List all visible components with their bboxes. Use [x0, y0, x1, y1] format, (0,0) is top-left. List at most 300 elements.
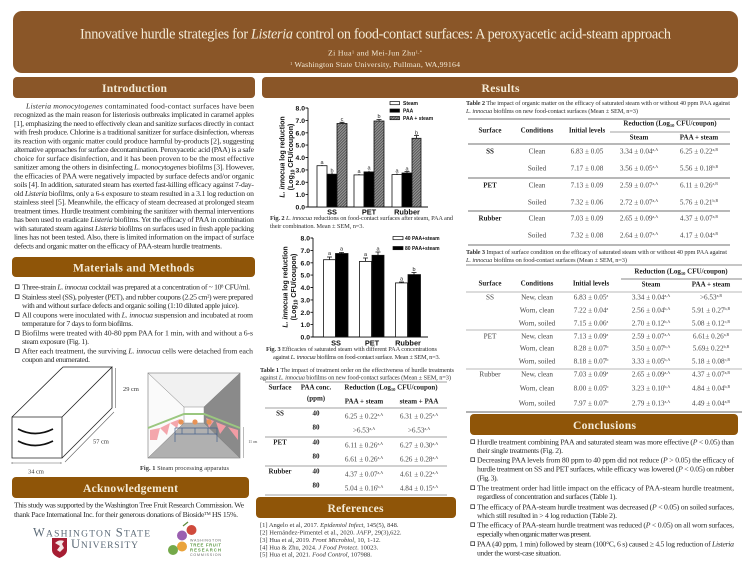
table 3: b,A — [664, 384, 670, 390]
diagram: steam chamber box: 29 cm — [123, 386, 139, 393]
list: conclusions: The treatment order had little impact on the efficacy of PAA-steam hurdle treatment, — [477, 484, 734, 492]
diagram: steam chamber box: 57 cm — [93, 438, 109, 446]
table 2: Surface — [479, 126, 501, 134]
text: introduction body: with saturated steam against Listeria biofilms on surfaces used in fresh apple packing — [14, 224, 254, 233]
text: acknowledgement: HS 15%. — [210, 510, 238, 519]
logo: Washington Tree Fruit Research Commission — [168, 522, 221, 557]
table 2: Soiled — [528, 232, 547, 240]
table 2: 6.83 ± 0.05 — [571, 148, 604, 156]
table 1: a,A — [433, 470, 438, 476]
table 1: a,A — [433, 455, 438, 461]
table 3: b,A — [664, 344, 670, 350]
list: conclusions: especially when organic matter was present. — [477, 530, 591, 538]
legend: figure 2: PAA + steam — [403, 116, 434, 122]
table 3: SS — [486, 294, 494, 302]
heading: results: Results — [482, 82, 520, 95]
bar chart: figure 2: 1.0 — [296, 192, 305, 199]
table 3: Conditions — [521, 280, 554, 288]
table 1: 4.84 ± 0.15 — [400, 484, 433, 492]
bar chart: figure 3: SS — [331, 338, 341, 348]
table 3: a,B — [725, 399, 730, 405]
table 3: 5.91 ± 0.27 — [692, 306, 725, 314]
table 3: c,B — [725, 319, 730, 325]
table 1: 6.11 ± 0.26 — [345, 442, 377, 450]
table 2: a,A — [653, 214, 658, 220]
table 3: 4.37 ± 0.07 — [692, 370, 725, 378]
heading: introduction: Introduction — [102, 82, 168, 95]
text: acknowledgement: This study was supported by the Washington Tree Fruit Research Commission. We — [14, 500, 245, 510]
table 2: 3.34 ± 0.04 — [620, 148, 653, 156]
table 2: Conditions — [521, 126, 554, 134]
table 3: New, clean — [521, 332, 553, 340]
table 2: 6.25 ± 0.22 — [680, 148, 713, 156]
bar chart: figure 2: Rubber — [394, 208, 420, 216]
table 3: 2.59 ± 0.07 — [632, 332, 665, 340]
table 3: 10 — [681, 271, 686, 276]
list: methods: After each treatment, the surviving L. innocua cells were detached from each — [22, 346, 253, 356]
bar chart: figure 3: a — [400, 276, 404, 282]
bar chart: figure 3: 5.0 — [301, 273, 310, 280]
table 3: 7.22 ± 0.04 — [574, 306, 606, 314]
table 1: 10 — [391, 387, 396, 392]
table 1: (ppm) — [307, 394, 326, 402]
bar chart: figure 2: 8.0 — [296, 106, 305, 112]
table 3 — [465, 249, 742, 412]
table 3: 2.65 ± 0.09 — [632, 370, 665, 378]
list: methods: coupon and enumerated. — [22, 355, 90, 364]
table 3: b — [606, 384, 608, 389]
table 2: a,B — [712, 181, 718, 187]
table 3: 3.34 ± 0.04 — [632, 294, 665, 302]
text: introduction body: [1], emphasizing the need to effectively clean and sanitize surfaces directly in contact — [14, 119, 255, 128]
text: introduction body: its reaction with organic matter could produce harmful by-products [2], suggesting — [14, 136, 254, 146]
table 3: a,B — [717, 293, 722, 299]
table 1: >6.53 — [408, 426, 424, 434]
list: references: [4] Hua & Zhu, 2024. J Food Protect. 10023. — [260, 544, 379, 551]
bar chart: figure 2: 0.0 — [296, 204, 305, 212]
list: methods: Three-strain L. innocua cocktail was prepared at a concentration of ~ 10 — [22, 282, 221, 292]
table 1: a,A — [433, 441, 438, 447]
table 2: Clean — [529, 214, 546, 222]
caption: table 3 — [465, 249, 727, 264]
logo: Washington Tree Fruit Research Commission: COMMISSION — [190, 553, 221, 557]
table 2: a,B — [713, 214, 718, 220]
table 3: Worn, soiled — [519, 400, 556, 408]
diagram: steam chamber box — [12, 367, 139, 476]
table 1 — [260, 367, 454, 495]
bar chart: figure 2: SS — [327, 208, 337, 216]
bar chart: figure 2: (Log — [288, 175, 295, 190]
bar chart: figure 2: a — [367, 166, 371, 172]
table 2: 2.72 ± 0.07 — [620, 198, 653, 206]
text: introduction body: old Listeria biofilms, only a 6-s exposure to steam resulted in a 3.1 log reduction on — [14, 189, 254, 198]
bar chart: figure 3: 8.0 — [301, 236, 310, 242]
text: introduction body: the efficacies of PAA were negatively impacted by surface defects and/or organic — [14, 172, 255, 180]
table 3: b,B — [724, 344, 730, 350]
text: acknowledgement: TM — [204, 511, 211, 516]
table 3: b,A — [664, 306, 670, 312]
table 3: 4.84 ± 0.04 — [692, 384, 725, 392]
table 2: Initial levels — [569, 126, 605, 134]
bar chart: figure 3: (Log — [291, 305, 298, 320]
bar chart: figure 3: 10 — [294, 299, 300, 305]
list: conclusions: Hurdle treatment combining PAA and saturated steam was more effective (P < 0.05) than — [477, 438, 734, 446]
heading: references — [256, 497, 456, 518]
table 1: SS — [276, 410, 284, 418]
diagram: steam chamber box: 34 cm — [28, 468, 44, 476]
table 3: CFU/coupon) — [685, 268, 728, 276]
table 3: 8.28 ± 0.07 — [574, 344, 606, 352]
table 1: CFU/coupon) — [395, 384, 438, 392]
table 3: 6.83 ± 0.05 — [574, 294, 606, 302]
table 3: 8.18 ± 0.07 — [574, 358, 606, 366]
table 2: SS — [486, 148, 494, 156]
table 1: a,A — [433, 484, 438, 490]
table 3: New, clean — [521, 370, 553, 378]
diagram: steam processing apparatus: 11 cm — [248, 440, 257, 444]
text: introduction body: alternative approaches for surface decontamination. Peroxyacetic acid (PAA) is a safe — [14, 145, 255, 154]
text: introduction body: sanitizer among the others in disinfecting L. monocytogenes biofilms [3]. However, — [14, 163, 254, 172]
bar chart: figure 2: 2.0 — [296, 180, 305, 187]
text: introduction body: lines has not been tested. Also, there is limited information on the impact of surface — [14, 233, 255, 242]
table 3: Worn, clean — [520, 344, 555, 352]
legend: figure 3 — [393, 236, 440, 252]
heading: acknowledgement: Acknowledgement — [83, 482, 178, 495]
table 3: 2.79 ± 0.13 — [632, 400, 665, 408]
bar chart: figure 3: 0.0 — [301, 334, 310, 342]
table 3: 4.49 ± 0.04 — [692, 400, 725, 408]
text: introduction body: choice for surface disinfection, and it has been proven to be the most effective — [14, 154, 255, 163]
text: acknowledgement — [14, 500, 245, 519]
table 3: Initial levels — [573, 280, 609, 288]
table 3: b,B — [725, 384, 731, 390]
list: methods: temperature for 7 days to form biofilms. — [22, 319, 133, 328]
table 2: a,A — [653, 164, 658, 170]
table 1: 80 — [312, 424, 320, 432]
bar chart: figure 2: 10 — [290, 169, 296, 175]
logo: Washington State University: UNIVERSITY — [71, 537, 138, 551]
bar chart: figure 3 — [282, 236, 440, 348]
list: conclusions: The efficacy of PAA-steam hurdle treatment was reduced (P < 0.05) on all worn surfaces, — [477, 520, 734, 530]
list: conclusions: The efficacy of PAA-steam hurdle treatment was decreased (P < 0.05) on soiled surfaces, — [477, 502, 734, 512]
table 2: a,A — [653, 147, 658, 153]
list: methods: 2 — [207, 294, 210, 298]
list: conclusions: which still resulted in > 4 log reduction (Table 2). — [477, 511, 617, 520]
caption: figure 3: Fig. 3 Efficacies of saturated steam with different PAA concentrations — [266, 346, 438, 353]
table 2: a,A — [653, 181, 658, 187]
table 1: PAA + steam — [345, 398, 383, 406]
list: conclusions: Decreasing PAA levels from 80 ppm to 40 ppm did not reduce (P > 0.05) the efficacy of — [477, 456, 734, 464]
bar chart: figure 2: PET — [362, 208, 377, 216]
table 2: b,B — [713, 164, 719, 170]
panel: acknowledgement — [12, 477, 249, 558]
panel: introduction — [13, 77, 255, 250]
list: methods: steam exposure (Fig. 1). — [22, 337, 89, 346]
legend: figure 3: 80 PAA+steam — [405, 246, 440, 252]
table 3: 3.23 ± 0.10 — [632, 384, 664, 392]
table 2: 7.32 ± 0.06 — [571, 198, 604, 206]
bar chart: figure 3: 2.0 — [301, 310, 310, 317]
table 1: a,A — [424, 426, 430, 432]
table 3: 5.18 ± 0.08 — [692, 358, 725, 366]
table 2: 4.17 ± 0.04 — [680, 232, 713, 240]
legend: figure 2: Steam — [403, 101, 419, 107]
bar chart: figure 2: a — [357, 169, 361, 175]
table 3: a,A — [665, 370, 670, 376]
caption: table 1: Table 1 The impact of treatment order on the effectiveness of hurdle treatments — [260, 367, 454, 374]
table 3: a — [606, 332, 608, 337]
bar chart: figure 2: 4.0 — [296, 155, 305, 162]
table 2: 4.37 ± 0.07 — [680, 214, 713, 222]
authors: 1 — [352, 50, 355, 54]
title banner — [13, 11, 738, 73]
table 1: 6.31 ± 0.25 — [400, 412, 433, 420]
text: introduction body: soils [4]. In addition, saturated steam has exerted fast-killing efficacy against 7-day- — [14, 180, 254, 189]
bar chart: figure 2: 5.0 — [296, 143, 305, 150]
table 2: Clean — [529, 148, 546, 156]
table 1: Surface — [269, 384, 291, 392]
bar chart: figure 3: L. innocua log reduction — [282, 246, 290, 328]
list: methods: with and without surface defects and organic soiling (1:10 diluted apple juice). — [22, 301, 239, 310]
table 3: Worn, soiled — [519, 358, 556, 366]
bar chart: figure 3: 6.0 — [301, 260, 310, 267]
bar chart: figure 2: 3.0 — [296, 167, 305, 174]
table 2: 7.03 ± 0.09 — [571, 214, 604, 222]
table 1: steam + PAA — [400, 398, 438, 406]
bar chart: figure 2: b — [330, 168, 334, 174]
bar chart: figure 2: 7.0 — [296, 118, 305, 125]
authors: and Mei-Jun Zhu — [355, 48, 415, 58]
list: conclusions: hurdle treatment on SS and PET surfaces, while efficacy was lowered (P < 0.05) on rubber — [477, 464, 734, 474]
table 2: 6.11 ± 0.26 — [680, 182, 712, 190]
heading: materials and methods: Materials and Methods — [73, 262, 194, 274]
list: methods: 8 — [221, 284, 224, 288]
list: methods: Biofilms were treated with 40-80 ppm PAA for 1 min, with and without a 6-s — [22, 328, 253, 338]
table 3: Rubber — [479, 370, 501, 378]
table 3: Surface — [479, 280, 501, 288]
table 3: PAA + steam — [692, 280, 730, 288]
caption: figure 2: their combination. Mean ± SEM, n=3. — [270, 223, 364, 230]
table 1: b,A — [377, 484, 383, 490]
table 1: PET — [273, 438, 287, 446]
bar chart: figure 2: c — [341, 117, 344, 123]
table 1: 4.61 ± 0.22 — [400, 470, 433, 478]
table 3: a,A — [665, 399, 670, 405]
bar chart: figure 3: 4.0 — [301, 285, 310, 292]
heading: references: References — [328, 502, 384, 515]
bar chart: figure 2: b — [415, 130, 418, 136]
table 1: 40 — [312, 410, 320, 418]
title: Innovative hurdle strategies for Listeria control on food-contact surfaces: A peroxyacetic acid-steam approach — [80, 26, 671, 42]
list: references: [5] Hua et al, 2021. Food Control, 107988. — [260, 552, 372, 558]
table 2: 5.56 ± 0.18 — [680, 164, 713, 172]
text: introduction body: treatment times. Hurdle treatment combining the sanitizer with thermal interventions — [14, 206, 254, 216]
table 2: Soiled — [528, 198, 547, 206]
table 3: a — [606, 370, 608, 375]
panel: references — [256, 497, 456, 558]
bar chart: figure 3: 3.0 — [301, 297, 310, 304]
table 2: a,B — [713, 147, 718, 153]
table 3: Worn, clean — [520, 384, 555, 392]
table 1: a,A — [378, 470, 383, 476]
caption: table 2: Table 2 The impact of organic matter on the efficacy of saturated steam with or without 40 ppm PAA against — [466, 100, 730, 107]
table 2: PAA + steam — [680, 134, 718, 142]
heading: results — [262, 77, 738, 98]
table 2: 7.32 ± 0.08 — [571, 232, 604, 240]
table 3: >6.53 — [700, 294, 717, 302]
bar chart: figure 3: a — [340, 246, 344, 252]
table 1: Reduction (Log — [344, 384, 391, 392]
logo: Washington Tree Fruit Research Commission: RESEARCH — [190, 548, 221, 552]
authors: Zi Hua — [328, 48, 352, 58]
heading: introduction — [13, 77, 255, 98]
caption: figure 3: against L. innocua biofilms on food-contact surface. Mean ± SEM, n=3. — [273, 354, 440, 361]
table 3: 3.50 ± 0.07 — [632, 344, 664, 352]
caption: figure 1: Fig. 1 Steam processing apparatus — [140, 465, 230, 472]
list: conclusions: regardless of concentration and surfaces (Table 1). — [477, 492, 617, 501]
bar chart: figure 3: PET — [365, 338, 380, 348]
table 3: 7.03 ± 0.09 — [574, 370, 606, 378]
bar chart: figure 3: 1.0 — [301, 322, 310, 329]
heading: acknowledgement — [12, 477, 249, 498]
table 1: 6.27 ± 0.30 — [400, 442, 433, 450]
table 1: 40 — [312, 438, 320, 446]
bar chart: figure 3: Rubber — [395, 338, 421, 348]
table 1: 5.04 ± 0.16 — [345, 484, 377, 492]
table 3: 5.69± 0.22 — [693, 344, 724, 352]
table 2: 7.13 ± 0.09 — [571, 182, 604, 190]
table 3: New, clean — [521, 294, 553, 302]
bar chart: figure 2: a — [395, 168, 399, 174]
table 2: 2.65 ± 0.09 — [620, 214, 653, 222]
table 1: 40 — [312, 468, 320, 476]
table 2: b,B — [713, 198, 719, 204]
table 1: PAA conc. — [301, 384, 332, 392]
bar chart: figure 3: a — [328, 251, 332, 257]
table 3: b — [606, 399, 608, 404]
panel: materials and methods — [12, 257, 257, 476]
table 3: b,A — [664, 319, 670, 325]
affiliation: 1 — [290, 61, 293, 66]
table 3: 5.08 ± 0.12 — [692, 320, 725, 328]
table 3: c,B — [725, 357, 730, 363]
table 3: 2.56 ± 0.04 — [632, 306, 664, 314]
table 3: a,B — [725, 370, 730, 376]
bar chart: figure 3: b — [412, 267, 416, 273]
table 3: Worn, clean — [520, 306, 555, 314]
table 2: Reduction (Log — [623, 120, 670, 128]
list: conclusions: (Fig. 3). — [477, 474, 498, 482]
table 3: b — [606, 344, 608, 349]
bar chart: figure 2: a — [320, 160, 324, 166]
list: methods: Stainless steel (SS), polyester (PET), and rubber coupons (2.25 cm — [22, 292, 207, 302]
bar chart: figure 2: b — [377, 114, 381, 120]
logo: Washington State University — [33, 526, 150, 558]
table 3: a,A — [665, 332, 670, 338]
table 3: b,A — [664, 357, 670, 363]
caption: figure 3 — [266, 346, 440, 361]
table 2: CFU/coupon) — [674, 120, 717, 128]
table 2 — [465, 100, 730, 245]
legend: figure 2 — [390, 101, 434, 122]
table 3: 3.33 ± 0.05 — [632, 358, 664, 366]
bar chart: figure 2 — [280, 101, 434, 216]
table 1: >6.53 — [353, 426, 369, 434]
text: introduction body: with fresh produce. Chlorine is a traditional sanitizer for surface disinfection, whereas — [14, 128, 254, 137]
table 1: Rubber — [269, 468, 291, 476]
caption: table 3: L. innocua biofilms on food-contact surfaces (Mean ± SEM, n=3) — [465, 257, 627, 264]
caption: table 2 — [465, 100, 730, 115]
text: introduction body: stainless steel [5]. Meanwhile, the efficacy of steam decreased at prolonged steam — [14, 198, 254, 207]
bar chart: figure 2: a — [405, 166, 409, 172]
table 2: Soiled — [528, 164, 547, 172]
affiliation: Washington State University, Pullman, WA,99164 — [292, 60, 460, 69]
table 1: a,A — [378, 455, 383, 461]
caption: table 3: Table 3 Impact of surface condition on the efficacy of saturated steam with or without 40 ppm PAA against — [466, 249, 727, 256]
bar chart: figure 2: L. innocua log reduction — [280, 116, 286, 198]
list: methods: CFU/ml. — [223, 282, 250, 292]
table 1: 4.37 ± 0.07 — [345, 470, 378, 478]
bar chart: figure 2: 6.0 — [296, 130, 305, 137]
table 2: a,B — [713, 231, 718, 237]
table 2: Clean — [529, 182, 546, 190]
table 1: 6.61 ± 0.26 — [345, 456, 378, 464]
list: methods: All coupons were inoculated with L. innocua suspension and incubated at room — [22, 310, 253, 320]
table 1: 80 — [312, 482, 320, 490]
legend: figure 2: PAA — [403, 108, 414, 114]
logo: Washington Tree Fruit Research Commission: TREE FRUIT — [190, 542, 221, 548]
table 3: a — [606, 306, 608, 311]
bar chart: figure 3: a — [376, 246, 380, 252]
bar chart: figure 2: CFU/coupon) — [288, 124, 295, 170]
table 3: Steam — [642, 280, 660, 288]
table 2: 2.64 ± 0.07 — [620, 232, 653, 240]
caption: figure 2 — [270, 215, 454, 230]
table 2: 5.76 ± 0.21 — [680, 198, 713, 206]
diagram: steam processing apparatus — [148, 373, 257, 458]
bar chart: figure 3: a — [364, 252, 368, 258]
table 3: a — [606, 319, 608, 324]
table 3: 6.61± 0.26 — [693, 332, 724, 340]
table 2: 10 — [670, 123, 675, 128]
list: methods: ) were prepared — [209, 292, 253, 302]
table 3: Reduction (Log — [634, 268, 681, 276]
text: introduction body: Listeria monocytogenes contaminated food-contact surfaces have been — [25, 102, 254, 110]
table 3: a — [606, 293, 608, 298]
list: conclusions: PAA (40 ppm, 1 min) followed by steam (100°C, 6 s) caused ≥ 4.5 log reduction of Listeria — [477, 540, 734, 548]
table 2: 7.17 ± 0.08 — [571, 164, 604, 172]
list: references: [3] Hua et al, 2019. Front Microbiol, 10, 1-12. — [260, 537, 381, 544]
table 3: PET — [484, 332, 497, 340]
caption: table 2: L. innocua biofilms on new food-contact surfaces (Mean ± SEM, n=3) — [465, 108, 638, 115]
table 3: 7.13 ± 0.09 — [574, 332, 606, 340]
text: introduction body: defects and organic matter on the efficacy of PAA-steam hurdle treatments. — [14, 242, 222, 250]
list: references: [1] Angelo et al, 2017. Epidemiol Infect, 145(5), 848. — [260, 522, 399, 529]
table 3: b — [606, 357, 608, 362]
list: conclusions: under the worst-case situation. — [477, 548, 561, 558]
legend: figure 3: 40 PAA+steam — [405, 236, 440, 242]
table 2: 2.59 ± 0.07 — [620, 182, 653, 190]
table 2: Rubber — [479, 214, 501, 222]
table 2: 3.56 ± 0.05 — [620, 164, 653, 172]
table 3: 7.97 ± 0.07 — [574, 400, 606, 408]
table 2: a,A — [653, 198, 658, 204]
heading: conclusions: Conclusions — [573, 419, 636, 432]
list: references — [260, 522, 402, 558]
table 3: 2.70 ± 0.12 — [632, 320, 664, 328]
table 3: b,B — [725, 306, 731, 312]
table 1: 80 — [312, 452, 320, 460]
